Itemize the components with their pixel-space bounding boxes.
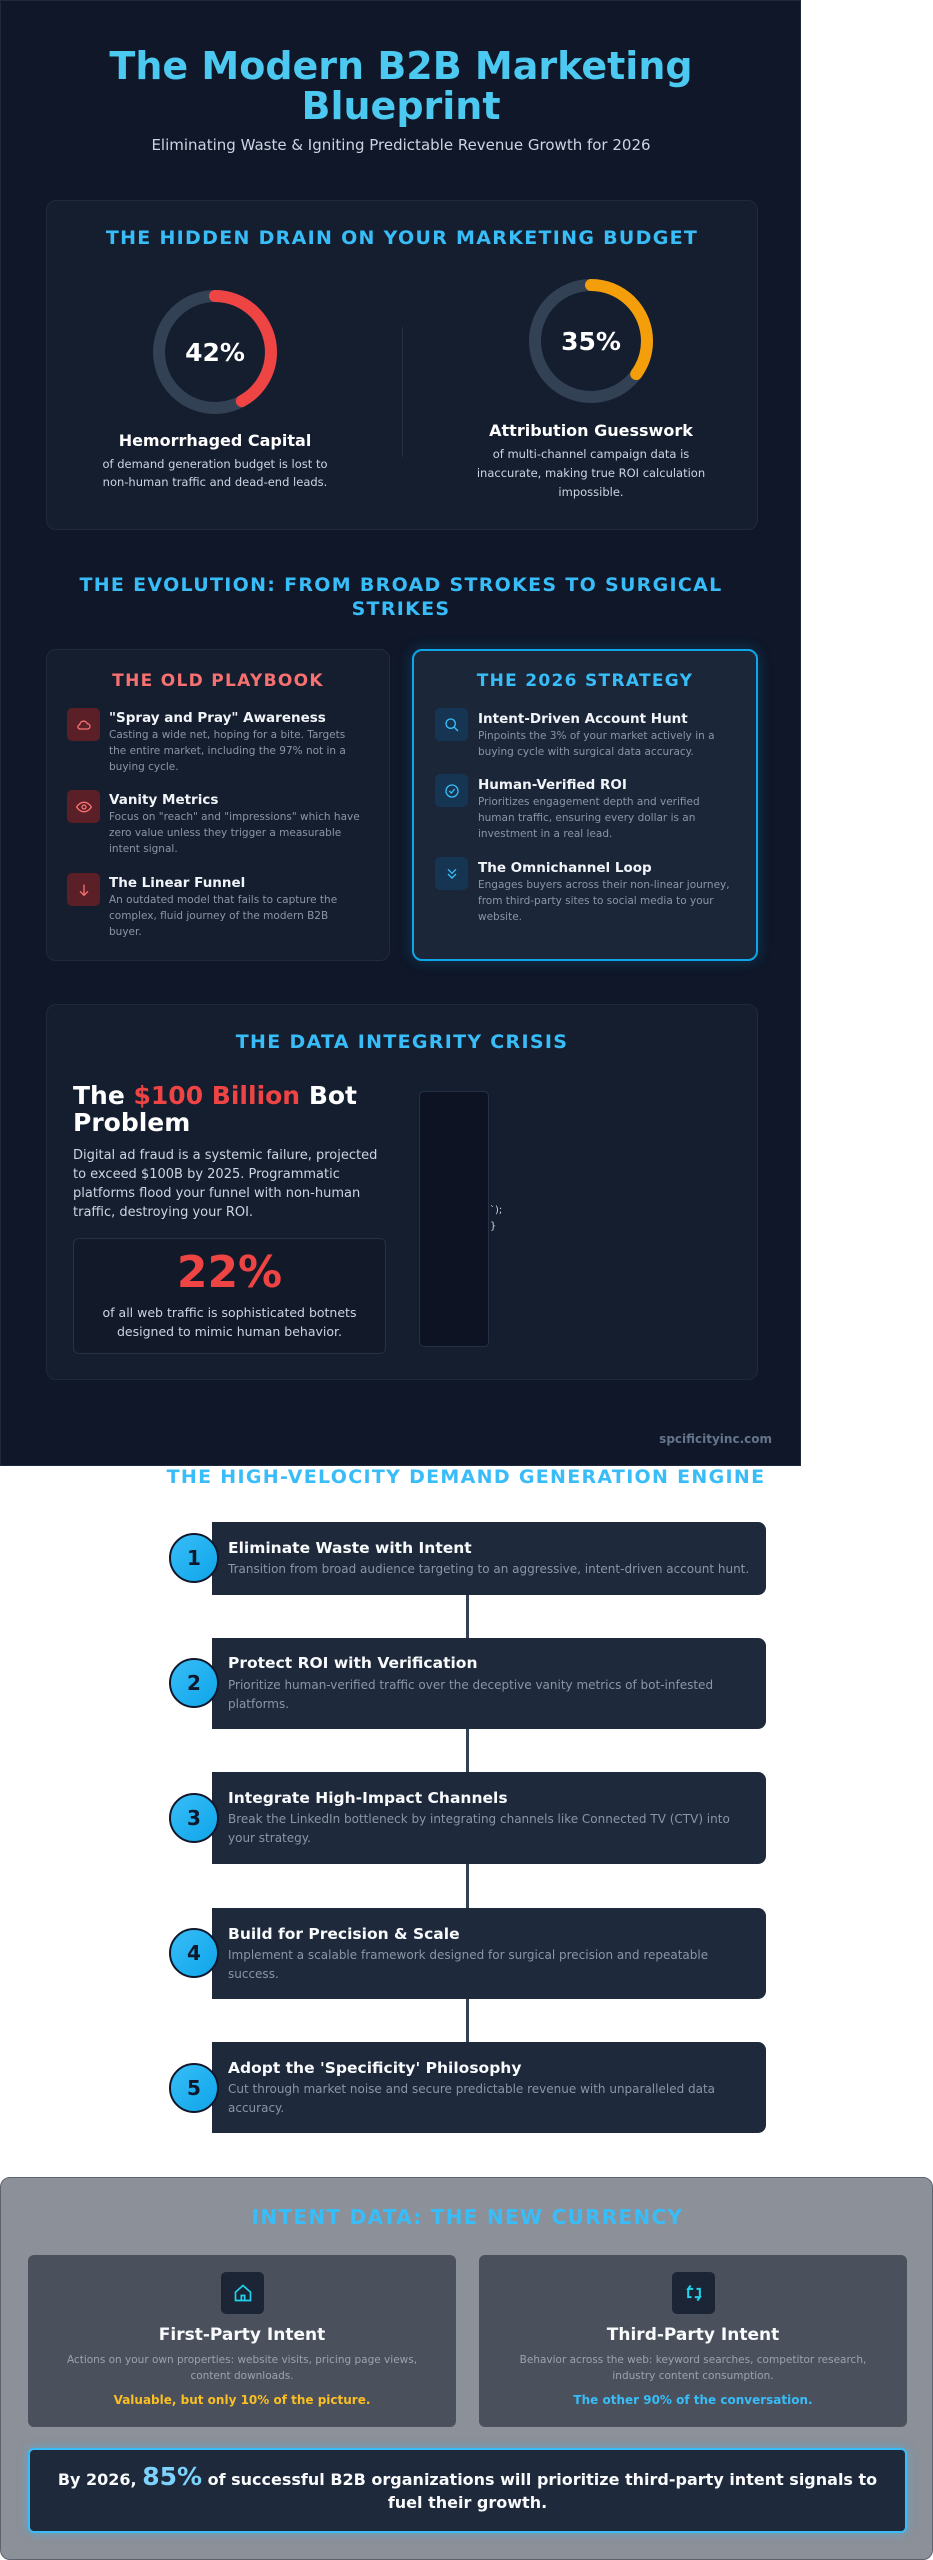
step 5: Adopt the 'Specificity' Philosophy bbox=[228, 2059, 521, 2077]
stat text: hemorrhaged: of demand generation budget is lost to bbox=[102, 457, 328, 471]
text: 5 bbox=[187, 2076, 201, 2100]
panel: data integrity bbox=[46, 1004, 758, 1380]
step 2 bbox=[212, 1638, 766, 1729]
heading: engine: THE HIGH-VELOCITY DEMAND GENERATION ENGINE bbox=[167, 1466, 765, 1488]
callout banner 85%: By 2026, 85% of successful B2B organizations will prioritize third-party intent signals to bbox=[58, 2462, 877, 2491]
step 4: Build for Precision & Scale bbox=[228, 1925, 460, 1943]
stat text: attribution: inaccurate, making true ROI calculation bbox=[477, 466, 705, 480]
donut 42% bbox=[153, 290, 277, 414]
title: The Modern B2B Marketing bbox=[109, 44, 693, 88]
step 1: Eliminate Waste with Intent bbox=[228, 1539, 472, 1557]
panel: 2026 strategy bbox=[412, 649, 758, 961]
item: vanity metrics: Focus on "reach" and "impressions" which have zero value unless they trigger a measurable intent signal. bbox=[109, 811, 360, 855]
item: linear funnel: The Linear Funnel bbox=[109, 875, 245, 891]
stat box 22%: of all web traffic is sophisticated botnets bbox=[103, 1305, 356, 1320]
step 3: Break the LinkedIn bottleneck by integrating channels like Connected TV (CTV) into your strategy. bbox=[228, 1812, 730, 1845]
step 5: Cut through market noise and secure predictable revenue with unparalleled data accuracy. bbox=[228, 2082, 715, 2115]
dark main panel bbox=[0, 0, 801, 1466]
donut 35%: 35% bbox=[561, 327, 621, 356]
step 4: Implement a scalable framework designed for surgical precision and repeatable success. bbox=[228, 1948, 708, 1981]
item: vanity metrics bbox=[67, 790, 360, 855]
code artifact text bbox=[490, 1205, 502, 1232]
item: human-verified bbox=[435, 774, 700, 840]
footer url: spcificityinc.com bbox=[659, 1432, 772, 1446]
bot problem heading: The $100 Billion Bot Problem bbox=[73, 1081, 357, 1137]
chart placeholder box bbox=[419, 1091, 489, 1347]
text: 4 bbox=[187, 1941, 201, 1965]
item: intent-driven: Intent-Driven Account Hunt bbox=[478, 711, 688, 727]
donut 42%: 42% bbox=[185, 338, 245, 367]
item: linear funnel bbox=[67, 873, 337, 938]
panel: 2026 strategy: THE 2026 STRATEGY bbox=[477, 671, 693, 691]
donut 35% bbox=[529, 279, 653, 403]
item: human-verified: Prioritizes engagement depth and verified human traffic, ensuring every dollar is an investment in a real lead. bbox=[478, 796, 700, 840]
text: 3 bbox=[187, 1806, 201, 1830]
step 1 bbox=[212, 1522, 766, 1595]
item: linear funnel: An outdated model that fails to capture the complex, fluid journey of the modern B2B buyer. bbox=[109, 894, 337, 938]
callout banner 85% bbox=[28, 2448, 907, 2533]
item: intent-driven: Pinpoints the 3% of your market actively in a buying cycle with surgical data accuracy. bbox=[478, 730, 715, 758]
item: omnichannel: Engages buyers across their non-linear journey, from third-party sites to social media to your website. bbox=[478, 879, 730, 923]
item: human-verified: Human-Verified ROI bbox=[478, 777, 627, 793]
step 4 bbox=[212, 1908, 766, 1999]
card: first-party: Valuable, but only 10% of the picture. bbox=[114, 2393, 370, 2407]
code artifact text: `); bbox=[490, 1205, 502, 1216]
item: spray and pray: Casting a wide net, hoping for a bite. Targets the entire market, including the 97% not in a buying cycle. bbox=[109, 729, 346, 773]
stat box 22% bbox=[73, 1238, 386, 1354]
card: first-party bbox=[28, 2255, 456, 2427]
stat box 22%: 22% bbox=[177, 1247, 282, 1298]
heading: evolution: THE EVOLUTION: FROM BROAD STROKES TO SURGICAL STRIKES bbox=[79, 574, 723, 620]
stat text: attribution: impossible. bbox=[558, 485, 624, 499]
step 1: Transition from broad audience targeting to an aggressive, intent-driven account hunt. bbox=[228, 1562, 749, 1576]
stat text: hemorrhaged bbox=[102, 431, 328, 489]
title bbox=[109, 44, 693, 128]
stat text: attribution: Attribution Guesswork bbox=[489, 421, 693, 440]
stat text: hemorrhaged: Hemorrhaged Capital bbox=[119, 431, 311, 450]
stat text: attribution bbox=[477, 421, 705, 499]
stat text: attribution: of multi-channel campaign data is bbox=[493, 447, 689, 461]
card: first-party: Actions on your own properties: website visits, pricing page views, content downloads. bbox=[67, 2354, 417, 2382]
step 5 bbox=[212, 2042, 766, 2133]
card: third-party bbox=[479, 2255, 907, 2427]
item: spray and pray: "Spray and Pray" Awareness bbox=[109, 710, 326, 726]
subtitle: Eliminating Waste & Igniting Predictable Revenue Growth for 2026 bbox=[151, 136, 651, 154]
step 2: Protect ROI with Verification bbox=[228, 1654, 477, 1672]
panel: hidden drain bbox=[46, 200, 758, 530]
divider bbox=[402, 327, 403, 457]
item: spray and pray bbox=[67, 708, 346, 773]
title: Blueprint bbox=[302, 84, 500, 128]
card: third-party: Third-Party Intent bbox=[607, 2325, 779, 2345]
panel: intent data: INTENT DATA: THE NEW CURRENCY bbox=[252, 2205, 683, 2229]
card: first-party: First-Party Intent bbox=[159, 2325, 325, 2345]
text: 2 bbox=[187, 1671, 201, 1695]
step 3: Integrate High-Impact Channels bbox=[228, 1789, 508, 1807]
code artifact text: } bbox=[490, 1221, 496, 1232]
item: intent-driven bbox=[435, 708, 715, 758]
panel: data integrity: THE DATA INTEGRITY CRISIS bbox=[236, 1031, 568, 1053]
panel: old playbook bbox=[46, 649, 390, 961]
item: vanity metrics: Vanity Metrics bbox=[109, 792, 218, 808]
card: third-party: Behavior across the web: keyword searches, competitor research, industry content consumption. bbox=[520, 2354, 866, 2382]
card: third-party: The other 90% of the conversation. bbox=[573, 2393, 813, 2407]
connector line bbox=[466, 1595, 469, 2045]
panel: old playbook: THE OLD PLAYBOOK bbox=[112, 671, 324, 691]
item: omnichannel: The Omnichannel Loop bbox=[478, 860, 652, 876]
step 2: Prioritize human-verified traffic over the deceptive vanity metrics of bot-infested platforms. bbox=[228, 1678, 713, 1711]
text: 1 bbox=[187, 1546, 201, 1570]
paragraph: Digital ad fraud is a systemic failure, projected to exceed $100B by 2025. Programmatic platforms flood your funnel with non-human traffic, destroying your ROI. bbox=[73, 1148, 377, 1220]
stat text: hemorrhaged: non-human traffic and dead-end leads. bbox=[103, 475, 327, 489]
step 3 bbox=[212, 1772, 766, 1864]
heading: THE HIDDEN DRAIN ON YOUR MARKETING BUDGET bbox=[106, 227, 698, 249]
stat box 22%: designed to mimic human behavior. bbox=[117, 1324, 342, 1339]
item: omnichannel bbox=[435, 857, 730, 923]
callout banner 85%: fuel their growth. bbox=[388, 2493, 547, 2512]
panel: intent data bbox=[0, 2177, 933, 2560]
